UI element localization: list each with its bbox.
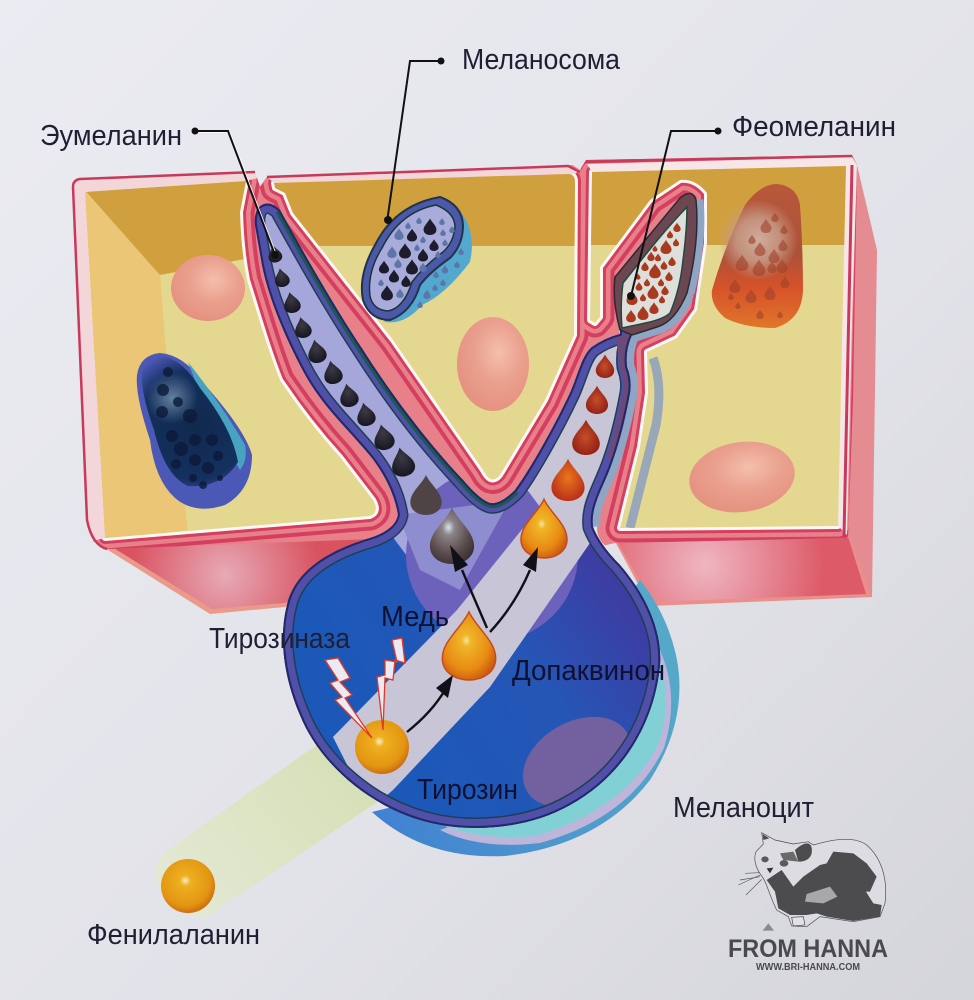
transition granule [410,475,442,515]
panel: middle epidermal cell [270,170,580,479]
panel: skin cell block side faces [100,165,877,614]
panel: right epidermal cell [588,160,858,528]
pheomelanin granules in right dendrite [551,354,614,501]
leader line: melanosome [384,58,444,224]
leader line: pheomelanin [627,128,722,300]
nucleus: right cell [685,435,799,519]
eumelanin granules in left dendrite [266,244,417,479]
logo text: website: WWW.BRI-HANNA.COM [756,962,860,973]
melanocyte body with dendrites [254,204,660,828]
label: melanosome: Меланосома [462,44,621,76]
panel: cell membranes [85,166,846,538]
phenylalanine ball [161,859,215,913]
icon: lightning bolt right [377,638,405,730]
label: tyrosinase: Тирозиназа [209,623,351,655]
tyrosine ball [355,720,409,774]
label: eumelanin: Эумеланин [40,120,182,152]
melanosome: red in right cell [712,184,803,328]
teal outer halo of melanocyte [372,580,679,856]
nucleus: left cell [171,255,245,321]
melanosome: blue in left cell [137,353,252,509]
phenylalanine channel band [155,725,395,918]
icon: cat watermark [738,833,886,931]
nucleus: middle cell [457,317,529,411]
label: tyrosine: Тирозин [417,774,518,806]
label: melanocyte: Меланоцит [673,792,814,824]
leader line: eumelanin [192,128,279,259]
label: phenylalanine: Фенилаланин [87,919,260,951]
outer cell walls [73,156,857,549]
membrane tint along right dendrite [593,200,697,527]
label: pheomelanin: Феомеланин [732,111,896,143]
icon: lightning bolt left [325,658,372,738]
arrow: dopa to eumelanin granule [450,545,487,628]
melanosome head in right dendrite [614,193,697,335]
label: copper: Медь [381,601,449,633]
melanosome: free bean in middle cell [362,197,472,322]
label: dopaquinone: Допаквинон [512,655,665,687]
dopaquinone droplet upper [521,499,567,558]
dopaquinone to eumelanin granule [430,508,474,564]
arrow: dopa to pheomelanin droplet [490,547,538,632]
logo text: from hanna: FROM HANNA [728,935,888,963]
arrow: tyrosine to dopa [407,675,453,732]
panel: left epidermal cell [80,175,376,540]
dopaquinone droplet lower [442,612,496,680]
